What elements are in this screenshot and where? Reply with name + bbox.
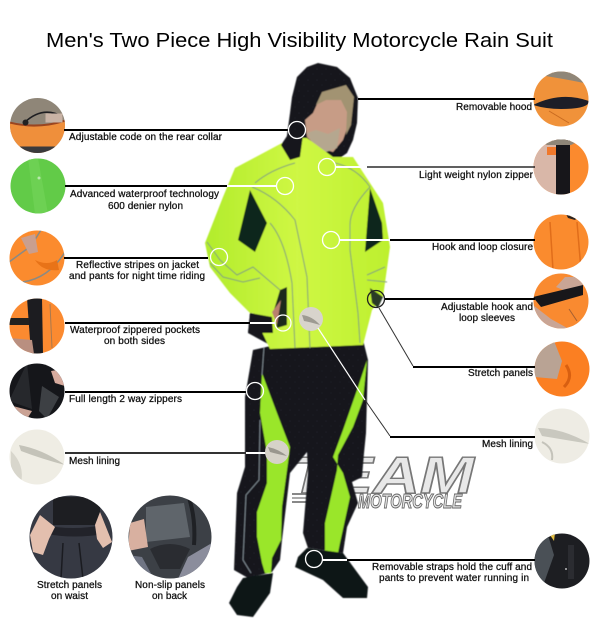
callout: nylon zipper — [318, 139, 589, 195]
thumbnail: zipper collar — [533, 139, 589, 195]
jacket pocket and hand — [274, 287, 287, 328]
leader line — [385, 298, 535, 300]
hood — [285, 63, 358, 160]
hotspot — [322, 232, 340, 248]
hotspot — [210, 248, 228, 266]
right cuff — [370, 288, 383, 308]
callout: adjustable cord — [10, 98, 306, 154]
mesh ball — [299, 307, 323, 331]
hotspot — [368, 290, 384, 308]
label: Adjustable hook and — [441, 302, 533, 313]
thumbnail: back — [128, 495, 212, 579]
label: Advanced waterproof technology — [70, 189, 219, 200]
label: Stretch panels — [468, 368, 533, 379]
thumbnail: sleeve elastic — [534, 341, 590, 397]
mesh ball — [265, 440, 289, 464]
label — [37, 580, 102, 602]
label: Light weight nylon zipper — [419, 170, 534, 181]
thumbnail: rear collar cord — [10, 98, 66, 154]
label: 600 denier nylon — [108, 201, 183, 212]
callout: mesh lining right — [299, 307, 590, 464]
watermark logo: TEAM — [290, 447, 476, 505]
boot right — [295, 548, 368, 598]
thumbnail: waist — [29, 495, 113, 579]
callout: removable straps — [306, 533, 590, 589]
label: Reflective stripes on jacket — [76, 260, 199, 271]
thumbnail: closure — [533, 214, 589, 270]
jacket side panel right — [365, 188, 383, 252]
jacket — [205, 138, 390, 349]
label — [70, 325, 200, 347]
label: on both sides — [104, 336, 165, 347]
callout: zippered pockets — [9, 298, 291, 354]
callout: reflective stripes — [9, 230, 228, 286]
leader line — [323, 559, 347, 561]
hotspot — [275, 315, 291, 331]
thumbnail: cuff strap — [534, 533, 590, 589]
label: Stretch panels — [37, 580, 102, 591]
callout: hook and loop sleeves — [368, 273, 589, 329]
leader line — [64, 257, 208, 259]
leader line — [335, 166, 368, 168]
callout: stretch panels right — [379, 308, 590, 397]
hair — [316, 85, 354, 135]
leader line — [65, 391, 246, 393]
label — [69, 260, 205, 282]
label: and pants for night time riding — [69, 271, 205, 282]
label — [70, 189, 219, 212]
hotspot — [306, 550, 322, 568]
leader line — [64, 129, 288, 131]
watermark logo — [290, 447, 476, 513]
callout: removable hood — [358, 71, 589, 127]
jacket reflective stripes — [207, 163, 387, 348]
label: loop sleeves — [459, 313, 515, 324]
label: Adjustable code on the rear collar — [69, 132, 223, 143]
label: Mesh lining — [69, 456, 120, 467]
thumbnail: sleeve strap — [533, 273, 589, 329]
thumbnail: mesh lining — [9, 429, 65, 485]
label: pants to prevent water running in — [379, 573, 529, 584]
label — [441, 302, 533, 324]
jacket rear collar — [281, 130, 303, 160]
leader line — [358, 98, 535, 100]
waist block under sleeve — [248, 313, 273, 333]
hotspot — [276, 178, 294, 194]
label: Removable hood — [456, 102, 532, 113]
label: Removable straps hold the cuff and — [372, 562, 532, 573]
thumbnail: green fabric — [10, 158, 66, 214]
label: Hook and loop closure — [432, 242, 533, 253]
thumbnail: zippered pocket — [9, 298, 65, 354]
leader line — [379, 308, 413, 366]
callout: 2 way zippers — [9, 363, 264, 419]
label: on back — [152, 591, 188, 602]
leader line — [318, 328, 365, 400]
hotspot — [288, 122, 306, 138]
thumbnail: mesh lining — [534, 408, 590, 464]
watermark logo: MOTORCYCLE — [358, 491, 462, 513]
label — [372, 562, 532, 584]
callout: waterproof technology — [10, 158, 294, 214]
hotspot — [318, 158, 336, 176]
label: on waist — [51, 591, 88, 602]
label: Waterproof zippered pockets — [70, 325, 200, 336]
pants lime stripe left — [257, 373, 290, 573]
callout: hook and loop closure — [322, 214, 589, 270]
leader line — [65, 185, 228, 187]
thumbnail: reflective stripes — [9, 230, 65, 286]
leader line — [65, 322, 250, 324]
boot left — [229, 573, 273, 617]
hotspot — [246, 382, 264, 400]
leader line — [340, 239, 390, 241]
pants lime stripe right — [325, 360, 367, 553]
panel: non-slip panels on back — [128, 495, 212, 602]
label: Full length 2 way zippers — [69, 394, 182, 405]
face — [305, 87, 353, 152]
callout: mesh lining left — [9, 429, 289, 485]
thumbnail: zipper — [9, 363, 65, 419]
label — [135, 580, 205, 602]
beard — [307, 128, 340, 152]
label: Mesh lining — [482, 439, 533, 450]
pants reflective piping — [243, 347, 264, 573]
label: Non-slip panels — [135, 580, 205, 591]
jacket side panel left — [238, 190, 267, 252]
title: Men's Two Piece High Visibility Motorcycle Rain Suit — [46, 29, 553, 52]
pants — [234, 313, 368, 578]
figure: man in rain suit — [205, 63, 390, 617]
leader line — [65, 452, 247, 454]
panel: stretch panels on waist — [29, 495, 113, 602]
thumbnail: hood pocket — [533, 71, 589, 127]
